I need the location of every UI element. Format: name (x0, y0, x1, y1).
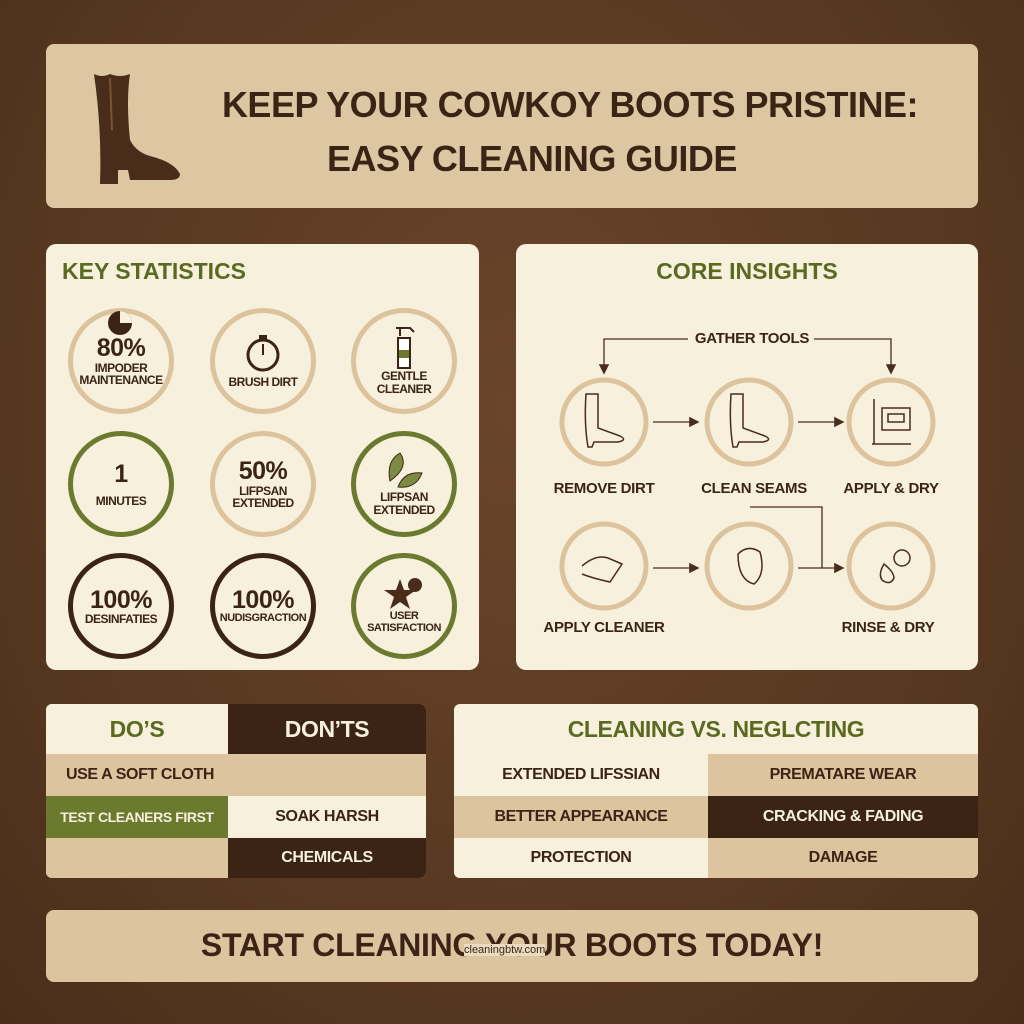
row: better appearance (454, 796, 708, 838)
row: extended lifespan: EXTENDED LIFSSIAN (502, 766, 660, 783)
title text (222, 84, 918, 179)
stat: brush dirt: BRUSH DIRT (228, 375, 298, 389)
cta text: START CLEANING YOUR BOOTS TODAY! (201, 927, 823, 963)
row: better appearance: BETTER APPEARANCE (494, 808, 668, 825)
stat: user satisfaction: SATISFACTION (367, 622, 441, 634)
label: rinse & dry: RINSE & DRY (842, 619, 934, 636)
row: test cleaners first: TEST CLEANERS FIRST (60, 809, 214, 825)
stat: 80% improper maintenance: IMPODER (95, 361, 147, 375)
stat: 50% lifespan extended: 50% (239, 457, 287, 485)
stat: lifespan extended leaves: LIFPSAN (380, 490, 428, 504)
label: apply & dry: APPLY & DRY (843, 480, 939, 497)
row: damage (708, 838, 978, 878)
row: chemicals (228, 838, 426, 878)
stat: 80% improper maintenance: MAINTENANCE (79, 373, 163, 387)
panel: key statistics (46, 244, 479, 670)
row: extended lifespan (454, 754, 708, 796)
heading: key statistics: KEY STATISTICS (62, 258, 246, 284)
label: remove dirt: REMOVE DIRT (554, 480, 654, 497)
heading: cleaning vs neglecting: CLEANING VS. NEGLCTING (568, 716, 864, 742)
label: gather tools: GATHER TOOLS (695, 330, 809, 347)
watermark: cleaningbtw.com (464, 944, 545, 956)
heading: core insights: CORE INSIGHTS (656, 258, 838, 284)
stat: 100% desinfaties: 100% (90, 586, 152, 614)
label: apply cleaner: APPLY CLEANER (543, 619, 665, 636)
header: do's (46, 704, 228, 754)
stat: 50% lifespan extended: LIFPSAN (239, 484, 287, 498)
stat: 100% desinfaties: DESINFATIES (85, 612, 157, 626)
stat: gentle cleaner: CLEANER (377, 382, 431, 396)
row: cracking & fading: CRACKING & FADING (763, 808, 923, 825)
stat: user satisfaction: USER (390, 610, 418, 622)
stat: gentle cleaner (351, 308, 457, 414)
stat: 1 minutes (68, 431, 174, 537)
stat: lifespan extended leaves (351, 431, 457, 537)
row: damage: DAMAGE (809, 849, 877, 866)
stat: lifespan extended leaves: EXTENDED (373, 503, 435, 517)
panel: cleaning vs neglecting (454, 704, 978, 878)
row: soak harsh (228, 796, 426, 838)
stat: user satisfaction (351, 553, 457, 659)
row: cracking & fading (708, 796, 978, 838)
stat: 100% nudisgraction: 100% (232, 586, 294, 614)
flow diagram (560, 338, 936, 610)
header: don'ts: DON’TS (285, 716, 369, 742)
label: clean seams: CLEAN SEAMS (701, 480, 807, 497)
stat: 50% lifespan extended: EXTENDED (232, 496, 294, 510)
row: use a soft cloth: USE A SOFT CLOTH (66, 766, 214, 783)
stat: brush dirt (210, 308, 316, 414)
title banner (46, 44, 978, 208)
stat: 80% improper maintenance: 80% (97, 334, 145, 362)
row: premature wear (708, 754, 978, 796)
panel: do's and don'ts (46, 704, 426, 878)
stat: 80% improper maintenance (68, 308, 174, 414)
panel: core insights (516, 244, 978, 670)
row: test cleaners first (46, 796, 228, 838)
row: chemicals: CHEMICALS (281, 849, 373, 866)
call to action banner (46, 910, 978, 982)
stat: 100% desinfaties (68, 553, 174, 659)
stat: 50% lifespan extended (210, 431, 316, 537)
row: protection: PROTECTION (531, 849, 631, 866)
icon: cowboy boot (94, 74, 180, 184)
header: don'ts (228, 704, 426, 754)
title text: EASY CLEANING GUIDE (327, 138, 737, 179)
header: do's: DO’S (110, 716, 164, 742)
title text: KEEP YOUR COWKOY BOOTS PRISTINE: (222, 84, 918, 125)
row: protection (454, 838, 708, 878)
row: use a soft cloth (46, 754, 426, 796)
row: premature wear: PREMATARE WEAR (770, 766, 916, 783)
stat: 1 minutes: MINUTES (96, 494, 146, 508)
icon: pie chart (108, 311, 132, 335)
stat: 100% nudisgraction (210, 553, 316, 659)
stat: 1 minutes: 1 (114, 460, 128, 488)
stat: gentle cleaner: GENTLE (381, 369, 427, 383)
stat: 100% nudisgraction: NUDISGRACTION (220, 612, 306, 624)
row: soak harsh: SOAK HARSH (275, 808, 379, 825)
